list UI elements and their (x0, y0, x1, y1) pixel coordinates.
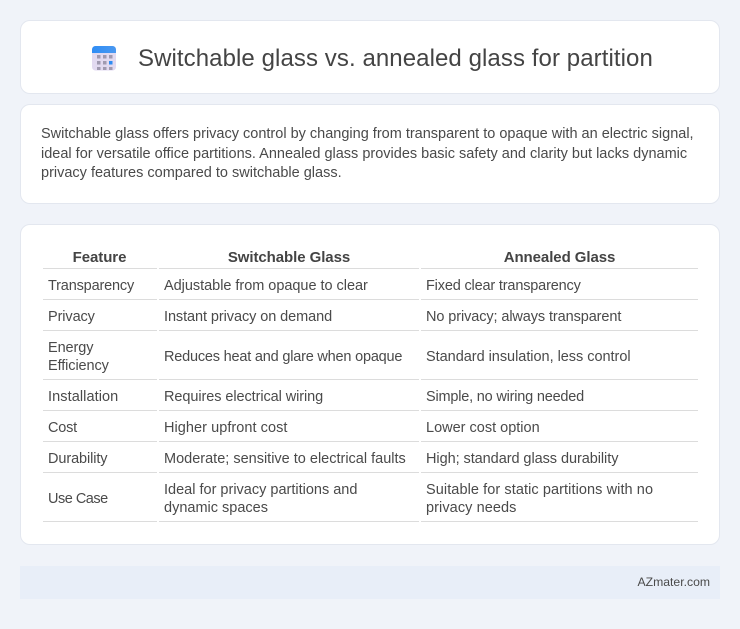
row: Energy Efficiency: Energy (48, 340, 93, 356)
row: Installation: Installation (48, 389, 118, 405)
cell: Standard insulation, less control (426, 349, 631, 365)
cell: privacy needs (426, 500, 517, 516)
row: Durability: Durability (48, 451, 107, 467)
cell (164, 482, 357, 516)
text block: description: privacy features compared to switchable glass. (41, 165, 342, 181)
text block: description: ideal for versatile office partitions. Annealed glass provides basic safety and clarity but lacks dynamic (41, 146, 687, 162)
icon: calendar grid (92, 46, 116, 70)
cell: Ideal for privacy partitions and (164, 482, 357, 498)
cell: Lower cost option (426, 420, 540, 436)
cell: Higher upfront cost (164, 420, 287, 436)
footer text: AZmater.com (638, 575, 710, 589)
text block: description: Switchable glass offers privacy control by changing from transparent to opaque with an electric signal, (41, 126, 694, 142)
row: Privacy: Privacy (48, 309, 95, 325)
row: Energy Efficiency (48, 340, 109, 374)
cell: Simple, no wiring needed (426, 389, 584, 405)
header: Feature: Feature (73, 249, 126, 266)
header: Switchable Glass: Switchable Glass (228, 249, 350, 266)
cell: Moderate; sensitive to electrical faults (164, 451, 406, 467)
header: Annealed Glass: Annealed Glass (504, 249, 615, 266)
text block: description (41, 126, 694, 181)
panel: title card (20, 20, 720, 94)
cell: dynamic spaces (164, 500, 268, 516)
cell: Adjustable from opaque to clear (164, 278, 368, 294)
row: Use Case: Use Case (48, 491, 108, 507)
cell: Reduces heat and glare when opaque (164, 349, 402, 365)
footer bar (20, 566, 720, 599)
cell: High; standard glass durability (426, 451, 618, 467)
cell: Fixed clear transparency (426, 278, 581, 294)
cell: Instant privacy on demand (164, 309, 332, 325)
cell: Requires electrical wiring (164, 389, 323, 405)
panel: comparison table (20, 224, 720, 545)
panel: description (20, 104, 720, 204)
title: Switchable glass vs. annealed glass for partition (138, 45, 653, 72)
row: Energy Efficiency: Efficiency (48, 358, 109, 374)
row: Transparency: Transparency (48, 278, 134, 294)
row: Cost: Cost (48, 420, 77, 436)
cell: No privacy; always transparent (426, 309, 621, 325)
cell (426, 482, 653, 516)
cell: Suitable for static partitions with no (426, 482, 653, 498)
